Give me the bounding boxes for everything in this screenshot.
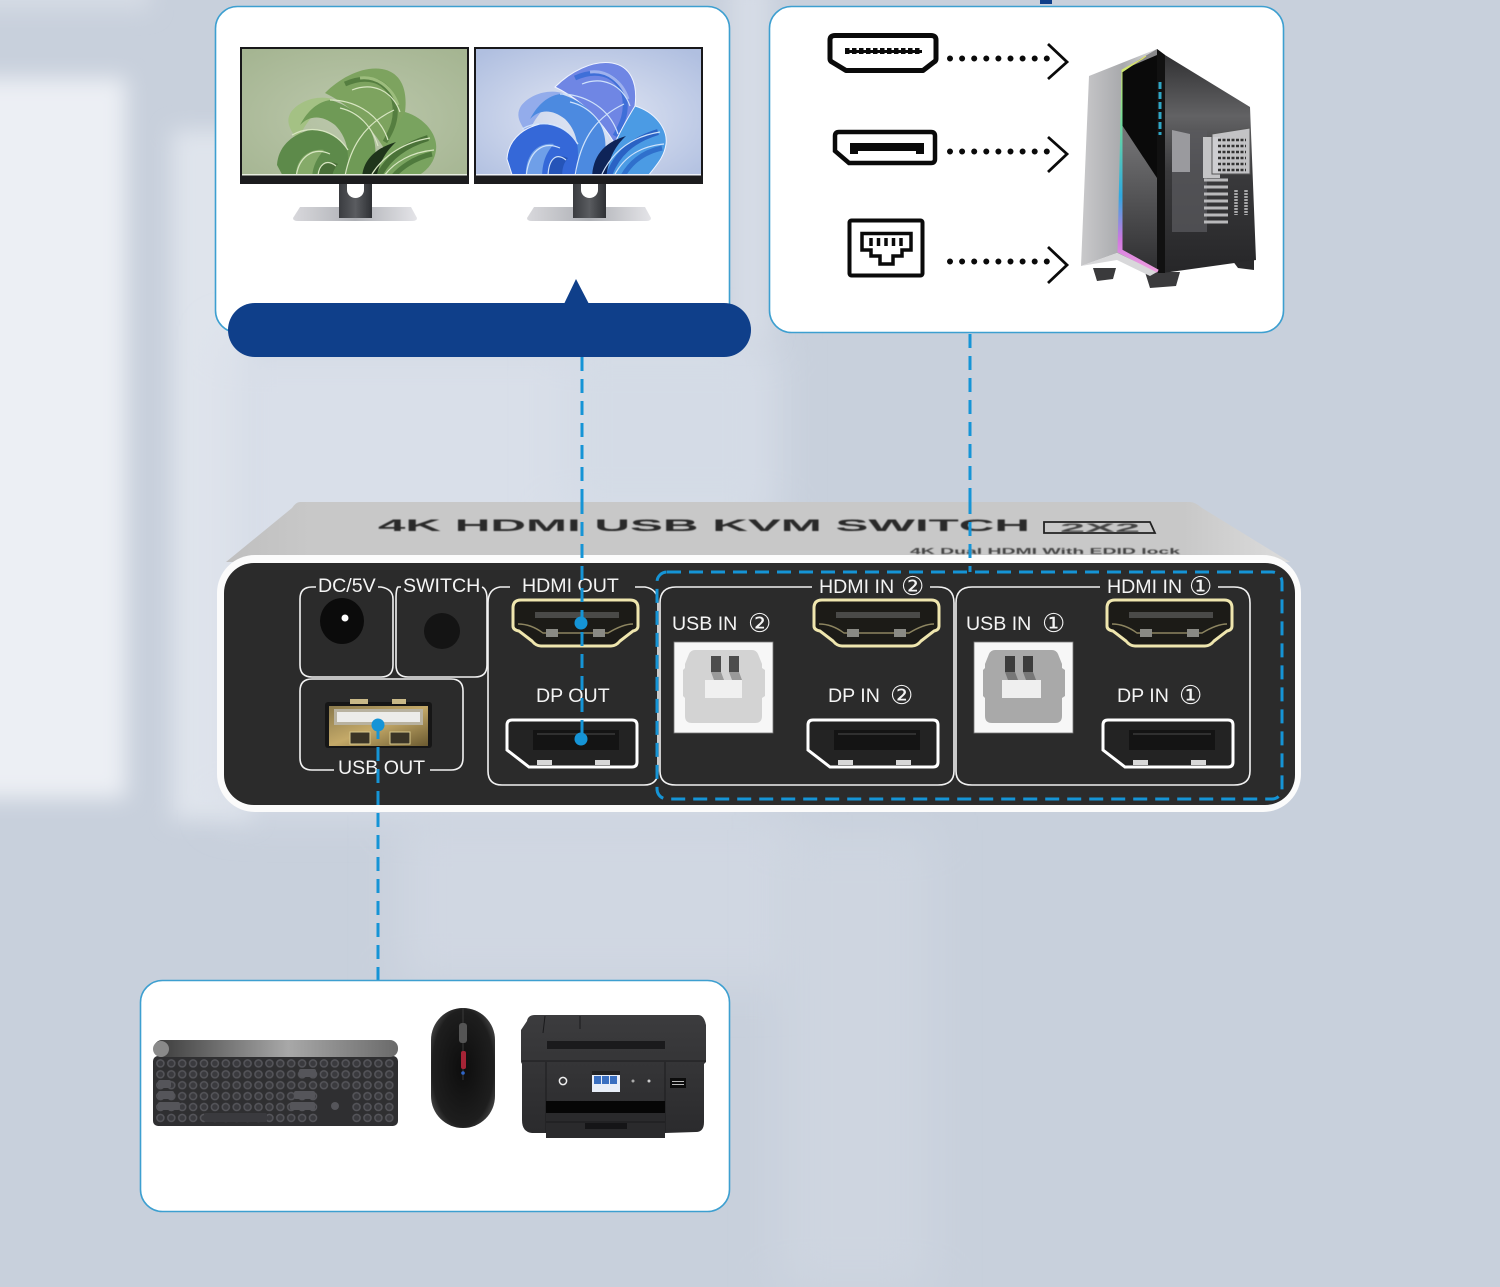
navy pointer bar <box>228 279 751 357</box>
port group: DC/5V: DC/5V <box>318 575 376 597</box>
USB-B port 2 <box>674 642 773 733</box>
port group: DC/5V <box>300 575 393 677</box>
device top surface: 4K Dual HDMI With EDID lock <box>910 547 1181 556</box>
arrow: DP to PC <box>950 137 1067 172</box>
port group: input 1: ① <box>1189 571 1212 601</box>
port group: input 2 <box>660 571 954 785</box>
arrow: USB to PC <box>950 247 1067 283</box>
KVM switch device <box>217 502 1301 812</box>
port group: input 2: ② <box>901 571 924 601</box>
device top surface: 4K HDMI USB KVM SWITCH <box>378 516 1030 535</box>
device top surface <box>226 502 1290 562</box>
printer <box>521 1015 706 1138</box>
icon: DisplayPort <box>835 132 935 163</box>
panel: dual monitors <box>216 6 751 357</box>
device top surface: 2X2 <box>1060 521 1141 535</box>
PC tower <box>1081 49 1256 288</box>
port group: input 1: DP IN <box>1117 685 1169 707</box>
port group: input 1: ① <box>1179 680 1202 710</box>
mouse <box>431 1008 495 1128</box>
port group: input 2: ② <box>890 680 913 710</box>
port group: USB OUT <box>300 679 463 779</box>
connector overlay: through device to output ports <box>574 500 588 746</box>
port group: input 2: HDMI IN <box>819 576 894 598</box>
port group: HDMI OUT and DP OUT <box>488 575 658 785</box>
dashed highlight around inputs <box>657 572 1282 799</box>
connector: monitors to HDMI/DP out <box>580 357 584 740</box>
port group: input 2: ② <box>748 608 771 638</box>
icon: RJ45 <box>850 220 922 276</box>
panel: keyboard, mouse and printer <box>140 980 730 1212</box>
port group: input 1 <box>956 571 1250 785</box>
USB-B port 1 <box>974 642 1073 733</box>
port group: HDMI OUT and DP OUT: DP OUT <box>536 685 610 707</box>
connector overlay: input drop line <box>968 500 972 572</box>
panel: PC inputs <box>770 0 1284 332</box>
device front face <box>217 555 1301 812</box>
connector: PC to inputs <box>968 334 972 572</box>
connector: USB out to peripherals <box>372 718 384 980</box>
port group: input 1: USB IN <box>966 613 1031 635</box>
port group: input 2: USB IN <box>672 613 737 635</box>
monitor: green wallpaper <box>240 47 469 221</box>
arrow: HDMI to PC <box>950 44 1067 79</box>
port group: input 1: ① <box>1042 608 1065 638</box>
icon: HDMI <box>830 36 936 70</box>
port group: input 1: HDMI IN <box>1107 576 1182 598</box>
port group: SWITCH <box>396 575 487 677</box>
port group: SWITCH: SWITCH <box>403 575 480 597</box>
port group: USB OUT: USB OUT <box>338 757 425 779</box>
port group: HDMI OUT and DP OUT: HDMI OUT <box>522 575 619 597</box>
monitor: blue wallpaper <box>474 47 703 221</box>
keyboard <box>153 1040 398 1126</box>
port group: input 2: DP IN <box>828 685 880 707</box>
